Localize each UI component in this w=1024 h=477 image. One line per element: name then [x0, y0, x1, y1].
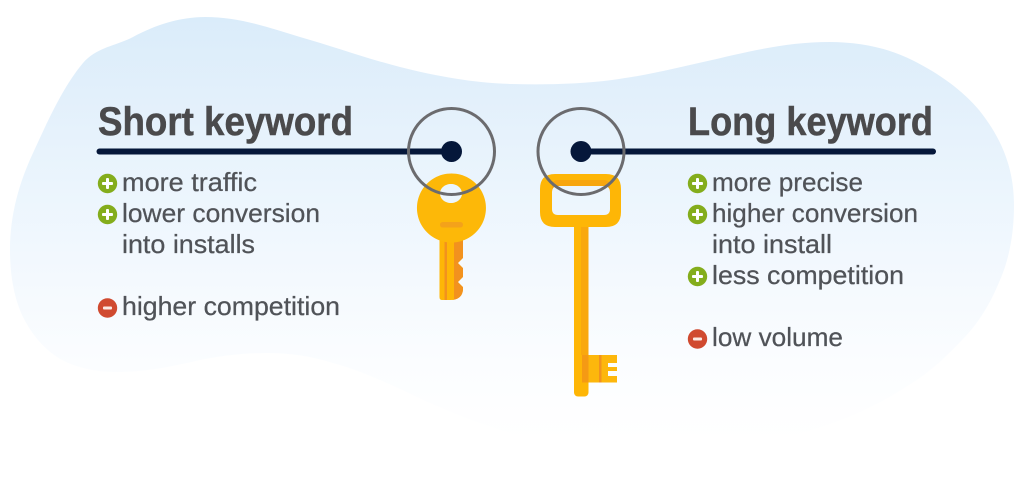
text: more traffic: more traffic	[122, 167, 257, 197]
divider line: short keyword	[96, 148, 452, 154]
icon: short key	[417, 174, 486, 300]
icon: plus	[688, 174, 707, 193]
icon: plus	[688, 205, 707, 224]
icon: minus	[688, 329, 707, 349]
text: less competition: less competition	[712, 260, 904, 290]
text: lower conversion into installs: into installs	[122, 229, 255, 259]
divider line: long keyword	[581, 148, 936, 154]
panel: long keyword	[581, 100, 936, 352]
icon: long key ring	[538, 108, 624, 194]
panel: short keyword	[96, 100, 452, 321]
text: lower conversion into installs: lower conversion	[122, 198, 320, 228]
icon: plus	[688, 267, 707, 286]
text: higher conversion into install: into install	[712, 229, 832, 259]
heading: long keyword: Long keyword	[688, 100, 933, 144]
text: low volume: low volume	[712, 322, 843, 352]
icon: short key ring	[408, 108, 494, 194]
text: higher conversion into install	[712, 198, 918, 259]
icon: plus	[98, 174, 117, 193]
icon: long key	[540, 174, 621, 396]
text: more precise: more precise	[712, 167, 863, 197]
text: higher competition: higher competition	[122, 291, 340, 321]
icon: minus	[98, 298, 117, 318]
text: higher conversion into install: higher conversion	[712, 198, 918, 228]
heading: short keyword: Short keyword	[98, 100, 353, 144]
text: lower conversion into installs	[122, 198, 320, 259]
icon: plus	[98, 205, 117, 224]
